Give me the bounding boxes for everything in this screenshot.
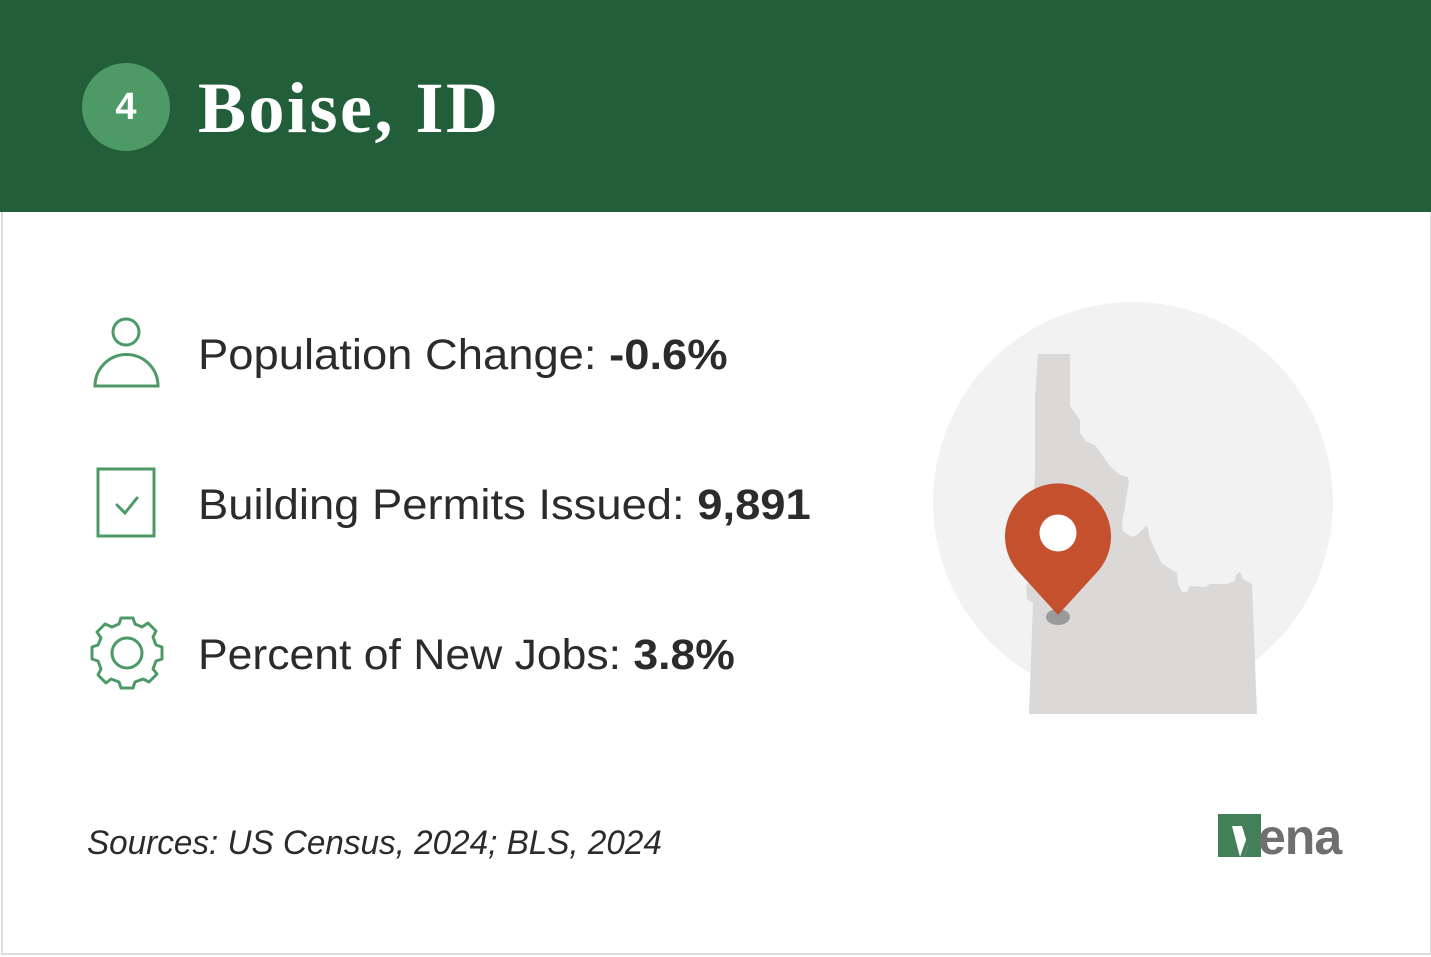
title: Boise, ID [198, 68, 501, 148]
content panel [1, 212, 1431, 955]
logo: vena: ena [1258, 809, 1341, 865]
map: Idaho [1026, 354, 1257, 714]
logo: vena [1218, 809, 1342, 865]
rank badge [82, 63, 170, 151]
stat: population: Population Change: -0.6% [198, 331, 728, 379]
rank badge: 4 [115, 86, 137, 128]
icon: gear [90, 616, 164, 690]
icon: checked document [96, 468, 156, 538]
stat: permits: Building Permits Issued: 9,891 [198, 481, 811, 529]
icon: location pin [1005, 483, 1111, 625]
sources note: Sources: US Census, 2024; BLS, 2024 [87, 824, 662, 862]
stat: jobs: Percent of New Jobs: 3.8% [198, 631, 735, 679]
icon: person [94, 318, 160, 388]
header bar [0, 0, 1431, 212]
